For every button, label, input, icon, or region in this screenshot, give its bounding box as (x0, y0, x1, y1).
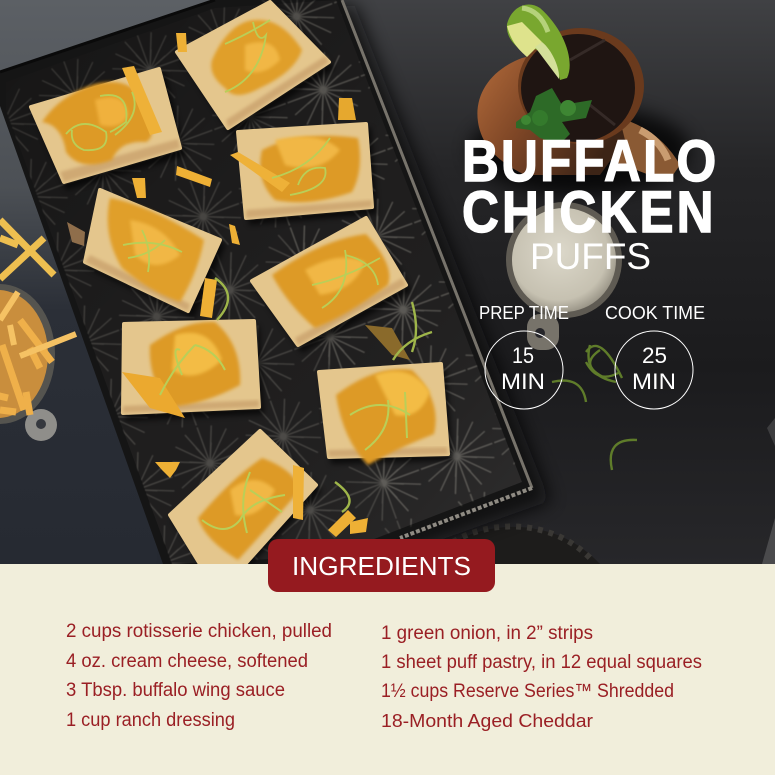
title: PUFFS (530, 236, 651, 277)
ingredient list: right column: 1 sheet puff pastry, in 12 equal squares (381, 652, 702, 673)
photo: loose cheese shreds and onion (67, 33, 432, 537)
photo: pastry shadows (33, 4, 453, 566)
photo: baking tray (0, 0, 550, 576)
ingredient list: right column: 1½ cups Reserve Series™ Shredded (381, 681, 674, 702)
photo: pastry 1 (31, 66, 180, 182)
prep time: PREP TIME (479, 303, 569, 323)
photo: pastry 7 (319, 364, 448, 465)
photo: ranch dressing cup (506, 202, 622, 350)
ingredient list: left column: 3 Tbsp. buffalo wing sauce (66, 680, 285, 701)
title: BUFFALO (462, 129, 718, 194)
ingredients panel (0, 564, 775, 775)
ingredient list: right column: 18-Month Aged Cheddar (381, 710, 593, 731)
prep time (479, 303, 569, 409)
cook time: 25 (642, 343, 667, 368)
title: CHICKEN (462, 180, 717, 245)
photo: scalloped plate under tray (430, 526, 600, 564)
ingredient list: right column: 1 green onion, in 2” strips (381, 623, 593, 644)
ingredients badge (268, 539, 495, 592)
cook time (605, 303, 705, 409)
title (462, 129, 718, 277)
ingredient list: right column (381, 623, 702, 731)
photo: pastry 8 (170, 431, 316, 564)
photo: pastry 2 (177, 2, 329, 128)
ingredients badge: INGREDIENTS (292, 551, 471, 581)
photo: pastry 5 (252, 218, 406, 345)
prep time: 15 (512, 343, 534, 368)
ingredient list: left column: 4 oz. cream cheese, softened (66, 651, 308, 672)
photo: pastry 6 (122, 321, 259, 418)
photo: slate background (0, 0, 775, 565)
prep time: MIN (501, 369, 545, 394)
cook time: MIN (632, 369, 676, 394)
photo: lime wedge (507, 5, 570, 80)
photo: cheese measuring cup (0, 284, 76, 441)
photo: green onion curls (552, 345, 637, 470)
photo: pastry 3 (230, 124, 372, 218)
ingredient list: left column: 2 cups rotisserie chicken, pulled (66, 621, 332, 642)
photo: loose cheese by cup (0, 220, 54, 279)
photo: parsley (516, 88, 592, 144)
ingredient list: left column: 1 cup ranch dressing (66, 710, 235, 731)
photo: pastry 4 (85, 190, 220, 311)
photo: copper mug (470, 28, 690, 195)
ingredient list: left column (66, 621, 332, 731)
cook time: COOK TIME (605, 303, 705, 323)
